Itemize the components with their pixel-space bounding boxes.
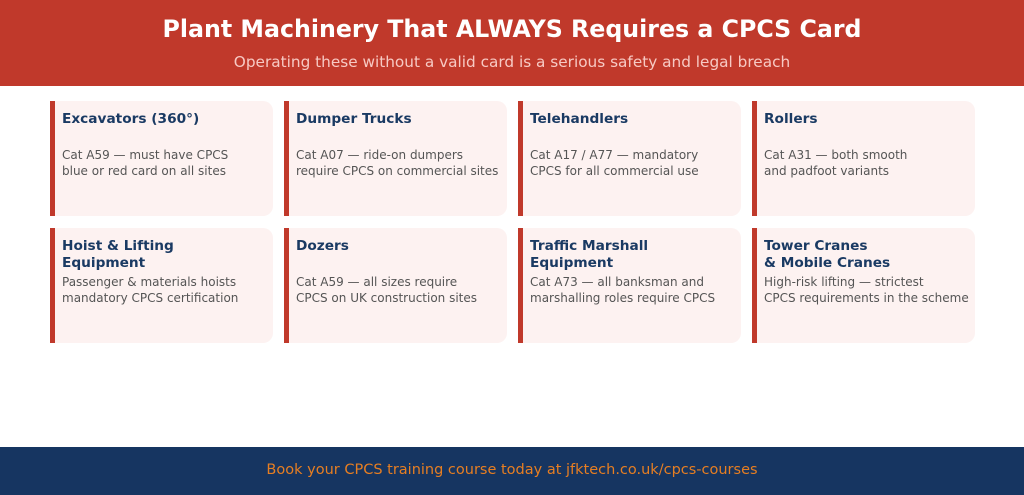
card: dozers	[284, 228, 507, 343]
card: rollers: Rollers	[764, 111, 818, 127]
card: excavators: Excavators (360°)	[62, 111, 199, 127]
card: excavators	[50, 101, 273, 216]
card: telehandlers: Telehandlers	[530, 111, 628, 127]
card: telehandlers: Cat A17 / A77 — mandatory	[530, 148, 698, 162]
card: rollers: Cat A31 — both smooth	[764, 148, 907, 162]
header	[0, 0, 1024, 86]
card: telehandlers: CPCS for all commercial use	[530, 164, 699, 178]
card: rollers	[752, 101, 975, 216]
card: dozers: CPCS on UK construction sites	[296, 291, 477, 305]
subtitle: Operating these without a valid card is a serious safety and legal breach	[234, 53, 790, 71]
card: dumper trucks: require CPCS on commercial sites	[296, 164, 498, 178]
card: telehandlers	[518, 101, 741, 216]
card: dumper trucks: Cat A07 — ride-on dumpers	[296, 148, 463, 162]
card: dozers: Cat A59 — all sizes require	[296, 275, 457, 289]
card: hoist: Passenger & materials hoists	[62, 275, 236, 289]
card: hoist: Equipment	[62, 255, 145, 271]
card: cranes	[752, 228, 975, 343]
card: dozers: Dozers	[296, 238, 349, 254]
footer: Book your CPCS training course today at jfktech.co.uk/cpcs-courses	[266, 462, 758, 478]
title: Plant Machinery That ALWAYS Requires a CPCS Card	[162, 15, 861, 43]
card: cranes: Tower Cranes	[764, 238, 868, 254]
card: hoist: mandatory CPCS certification	[62, 291, 238, 305]
card: dumper trucks: Dumper Trucks	[296, 111, 412, 127]
card: excavators: blue or red card on all sites	[62, 164, 226, 178]
card: hoist	[50, 228, 273, 343]
card: cranes: High-risk lifting — strictest	[764, 275, 924, 289]
card: traffic marshall: Cat A73 — all banksman and	[530, 275, 704, 289]
card: rollers: and padfoot variants	[764, 164, 889, 178]
card: traffic marshall: Equipment	[530, 255, 613, 271]
card: hoist: Hoist & Lifting	[62, 238, 174, 254]
card: traffic marshall: Traffic Marshall	[530, 238, 648, 254]
card: cranes: CPCS requirements in the scheme	[764, 291, 969, 305]
card: traffic marshall: marshalling roles require CPCS	[530, 291, 715, 305]
card: excavators: Cat A59 — must have CPCS	[62, 148, 228, 162]
card: traffic marshall	[518, 228, 741, 343]
card: dumper trucks	[284, 101, 507, 216]
card: cranes: & Mobile Cranes	[764, 255, 890, 271]
footer	[0, 447, 1024, 495]
